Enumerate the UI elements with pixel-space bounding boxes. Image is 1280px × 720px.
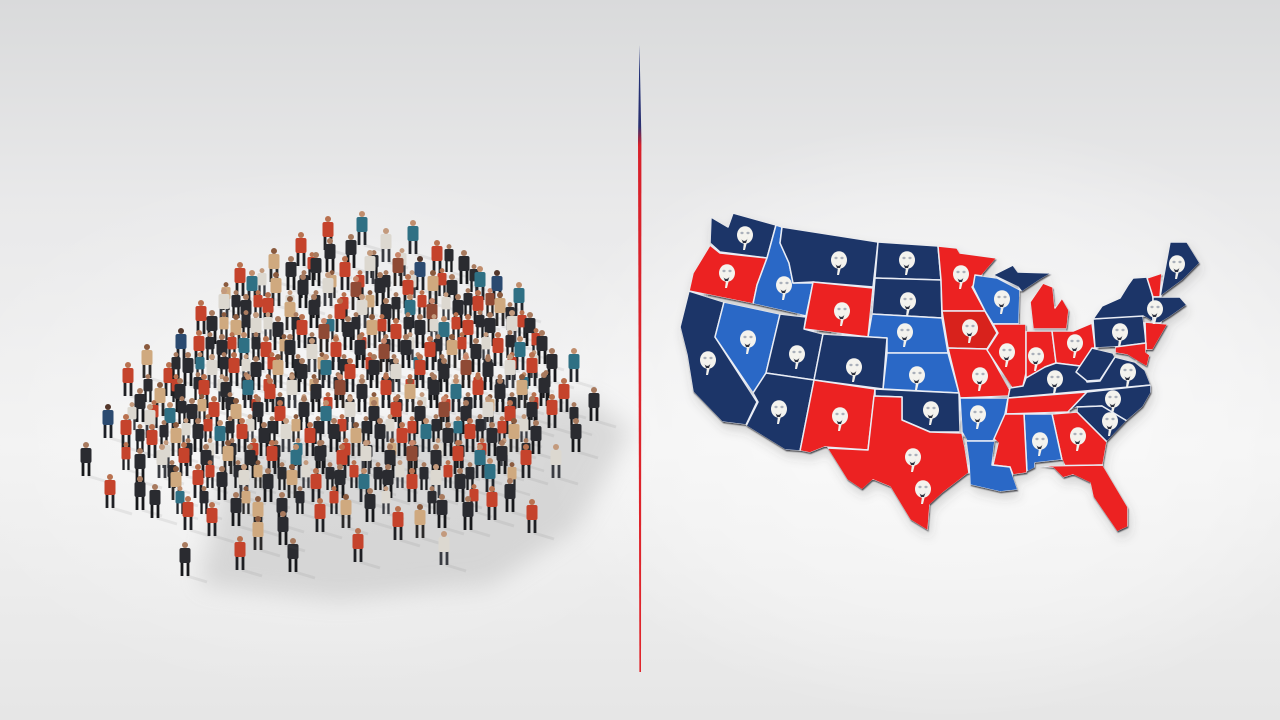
state: Michigan lower peninsula: [1030, 283, 1069, 329]
state: West Virginia: [1076, 348, 1115, 381]
crowd ground shadow: [200, 400, 632, 600]
state: New Mexico: [800, 380, 875, 453]
state: South Carolina: [1077, 406, 1127, 442]
state: Arkansas: [960, 398, 1008, 441]
state: Oregon: [689, 245, 767, 304]
state: Montana: [780, 227, 878, 287]
state: Illinois: [987, 324, 1026, 388]
state: North Dakota: [875, 242, 941, 280]
state: Kansas: [883, 353, 959, 393]
state: Maryland and Delaware: [1115, 343, 1150, 367]
state: Utah: [766, 314, 823, 380]
state: Vermont: [1147, 273, 1162, 297]
state: Colorado: [814, 334, 887, 389]
state: Oklahoma: [875, 389, 960, 432]
state: Arizona: [746, 373, 814, 451]
state: Michigan upper peninsula: [993, 265, 1052, 292]
state: Nebraska: [868, 314, 948, 353]
state: Wisconsin: [973, 275, 1020, 324]
state: Mississippi: [993, 414, 1027, 475]
crowd of people: [80, 211, 616, 582]
state: Florida: [1037, 465, 1128, 532]
state: Kentucky and Virginia: [1008, 357, 1151, 398]
state: Wyoming: [804, 282, 873, 337]
state: Texas: [827, 396, 969, 531]
state: South Dakota: [872, 278, 942, 318]
state: New England: [1147, 297, 1187, 324]
state: Alabama: [1024, 414, 1062, 472]
state: Washington: [710, 213, 776, 258]
divider line: [638, 45, 641, 672]
state: California: [680, 291, 757, 425]
state: Idaho: [753, 225, 813, 316]
state: Pennsylvania: [1093, 315, 1146, 348]
state: Ohio: [1052, 323, 1095, 366]
state: Georgia: [1052, 412, 1107, 466]
state: Maine: [1160, 242, 1200, 297]
state: Tennessee: [1006, 392, 1087, 414]
state: Nevada: [715, 302, 780, 393]
state: New York: [1093, 277, 1153, 322]
state: North Carolina: [1068, 385, 1151, 421]
map of the United States: [680, 213, 1200, 532]
state: Louisiana: [966, 441, 1018, 492]
state: Indiana: [1026, 331, 1056, 378]
state: New Jersey: [1145, 322, 1168, 350]
state: Missouri: [948, 348, 1010, 398]
state: Minnesota: [938, 246, 997, 311]
state: Iowa: [942, 311, 997, 349]
